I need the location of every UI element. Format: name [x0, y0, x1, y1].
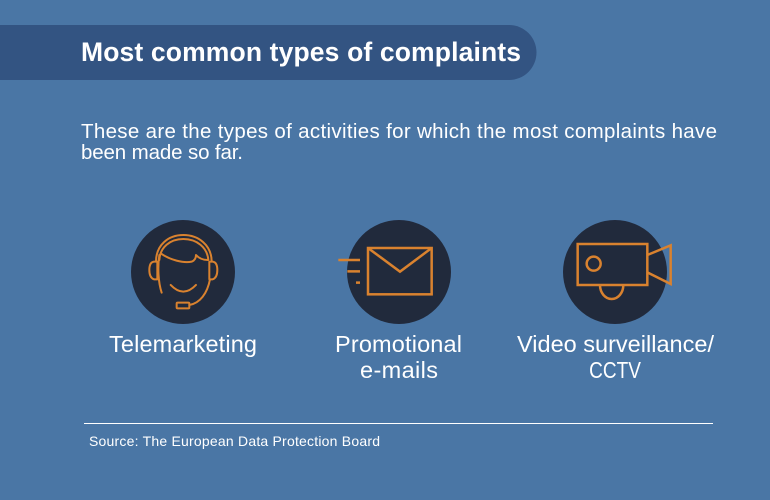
label: Video surveillance/: [517, 331, 714, 357]
source: Source: The European Data Protection Board: [89, 433, 380, 449]
intro text: [81, 120, 717, 164]
label: e-mails: [360, 357, 438, 383]
title: Most common types of complaints: [81, 37, 521, 67]
label: [517, 331, 714, 383]
icon: video camera: [563, 220, 671, 324]
item: promotional e-mails: [335, 220, 462, 383]
label: CCTV: [589, 357, 642, 383]
item: video surveillance: [517, 220, 714, 383]
intro text: been made so far.: [81, 141, 243, 164]
label: Telemarketing: [109, 331, 257, 357]
item: telemarketing: [109, 220, 257, 357]
intro text: These are the types of activities for which the most complaints have: [81, 120, 717, 143]
icon: headset agent: [131, 220, 235, 324]
icon: envelope: [338, 220, 451, 324]
title banner: [0, 25, 536, 80]
label: Promotional: [335, 331, 462, 357]
label: [335, 331, 462, 383]
